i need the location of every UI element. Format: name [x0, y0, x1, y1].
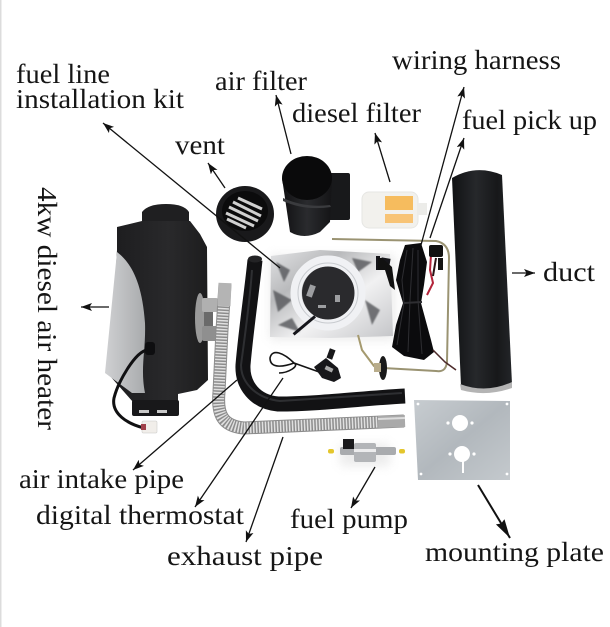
item: wiring harness: [378, 243, 456, 370]
heater base connector: [132, 400, 179, 416]
item: vent: [216, 186, 274, 242]
parts soft shadows: [270, 255, 395, 466]
arrow: exhaust pipe: [246, 437, 283, 542]
label: fuel line installation kit: [16, 59, 185, 114]
fittings: [293, 256, 391, 336]
foil bag: [270, 250, 393, 338]
label: diesel filter: diesel filter: [292, 98, 421, 128]
heater collar: [142, 204, 189, 224]
item: mounting plate: [414, 400, 510, 480]
cable grommet: [145, 342, 155, 355]
cylinder: [282, 178, 332, 236]
item: air filter: [282, 156, 350, 236]
item: air intake pipe: [241, 256, 405, 404]
label: 4kw diesel air heater: 4kw diesel air heater: [32, 187, 62, 430]
item: duct: [452, 170, 512, 393]
foil creases: [273, 258, 380, 332]
arrow: duct: [512, 272, 535, 274]
label: fuel line installation kit: fuel line: [16, 59, 110, 89]
dark contents: [302, 266, 356, 320]
red wires: [427, 255, 433, 295]
arrow: fuel pump: [351, 467, 375, 508]
arrow: air intake pipe: [133, 380, 237, 470]
vent opening: [222, 191, 268, 231]
thermostat head: [314, 358, 341, 382]
arrow: diesel filter: [375, 133, 390, 182]
label: mounting plate: mounting plate: [425, 537, 604, 567]
arrow: vent: [208, 163, 225, 188]
label: air filter: air filter: [215, 66, 307, 96]
connector slots: [139, 410, 167, 413]
arrow: wiring harness: [421, 87, 464, 245]
item: diesel filter: [362, 192, 427, 228]
filter element: [385, 196, 413, 210]
label: digital thermostat: digital thermostat: [36, 500, 245, 530]
arrow: digital thermostat: [195, 378, 283, 507]
item: fuel pump: [328, 439, 405, 462]
duct metal end: [460, 382, 512, 393]
side pipe: [322, 173, 350, 220]
pick up flange: [379, 356, 387, 380]
arrow: fuel pick up: [430, 138, 464, 238]
arrow: air filter: [276, 95, 291, 154]
heater grey cover: [105, 252, 145, 393]
label: wiring harness: wiring harness: [392, 45, 561, 75]
heater cable: [114, 350, 147, 428]
vent outer ring: [216, 186, 274, 242]
heater side flange: [195, 293, 218, 343]
coiled white fuel line: [296, 261, 360, 325]
label: exhaust pipe: exhaust pipe: [167, 541, 323, 571]
label: air intake pipe: air intake pipe: [19, 464, 184, 494]
item: exhaust pipe: [219, 283, 405, 428]
plate holes: [417, 403, 508, 475]
item: digital thermostat: [270, 348, 341, 382]
label: vent: vent: [175, 130, 226, 160]
cylinder band: [283, 198, 331, 208]
item: fuel line installation kit: [270, 250, 393, 338]
item: fuel pick up: [332, 239, 449, 380]
left edge strip: [0, 0, 2, 627]
connectors: [429, 245, 443, 257]
heater body: [110, 221, 208, 402]
content details: [306, 284, 340, 308]
wire bundle: [392, 243, 434, 360]
label: duct: duct: [543, 257, 596, 287]
vent slats: [226, 198, 262, 228]
label: fuel line installation kit: installation kit: [16, 84, 185, 114]
cylinder opening: [282, 156, 332, 200]
arrow: mounting plate: [478, 485, 510, 538]
arrow: fuel line kit: [103, 123, 280, 268]
label: fuel pick up: fuel pick up: [462, 105, 597, 135]
item: heater: [105, 204, 218, 433]
label: fuel pump: fuel pump: [290, 504, 408, 534]
arrow: heater: [81, 306, 109, 308]
cable plug: [141, 421, 157, 433]
